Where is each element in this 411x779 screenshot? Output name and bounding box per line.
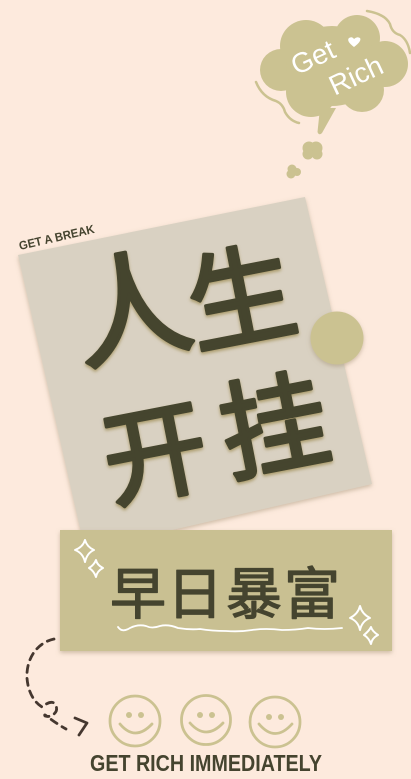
icon: sparkle small right bbox=[364, 627, 378, 644]
banner bbox=[60, 530, 392, 651]
icon: sparkle large right bbox=[350, 606, 370, 630]
cloud body bbox=[260, 15, 408, 134]
character 富: 富 bbox=[284, 550, 340, 631]
tilted card bbox=[18, 197, 372, 550]
cloud outline bottom left bbox=[256, 82, 299, 123]
circle accent bbox=[310, 312, 364, 364]
heading: 人生开挂 bbox=[55, 204, 341, 530]
banner text: 早日暴富 bbox=[110, 550, 340, 631]
character 生: 生 bbox=[172, 204, 308, 378]
smallest puff bbox=[286, 164, 301, 178]
character 开: 开 bbox=[88, 362, 219, 530]
thought bubble bbox=[256, 11, 410, 178]
caption: GET A BREAK: GET A BREAK bbox=[18, 222, 96, 253]
smiley 3 bbox=[250, 697, 300, 747]
banner panel bbox=[60, 530, 392, 651]
small puff bbox=[302, 142, 322, 160]
cloud outline top right bbox=[367, 11, 410, 53]
text: Rich: Rich bbox=[324, 50, 388, 101]
character 挂: 挂 bbox=[205, 332, 341, 506]
text: Get: Get bbox=[286, 34, 340, 81]
character 人: 人 bbox=[55, 204, 204, 395]
character 早: 早 bbox=[110, 550, 166, 631]
character 暴: 暴 bbox=[226, 550, 282, 631]
icon: sparkle small left bbox=[89, 560, 103, 577]
icon: sparkle large left bbox=[75, 540, 94, 562]
caption: GET RICH IMMEDIATELY: GET RICH IMMEDIATELY bbox=[90, 750, 322, 776]
icon: heart bbox=[348, 37, 360, 47]
smiley row bbox=[110, 696, 300, 747]
arrow path bbox=[27, 639, 66, 729]
dashed arrow bbox=[27, 639, 87, 735]
wavy underline bbox=[118, 625, 342, 631]
arrow head bbox=[75, 718, 87, 735]
smiley 2 bbox=[182, 696, 230, 744]
smiley 1 bbox=[110, 696, 160, 746]
character 日: 日 bbox=[167, 550, 223, 631]
